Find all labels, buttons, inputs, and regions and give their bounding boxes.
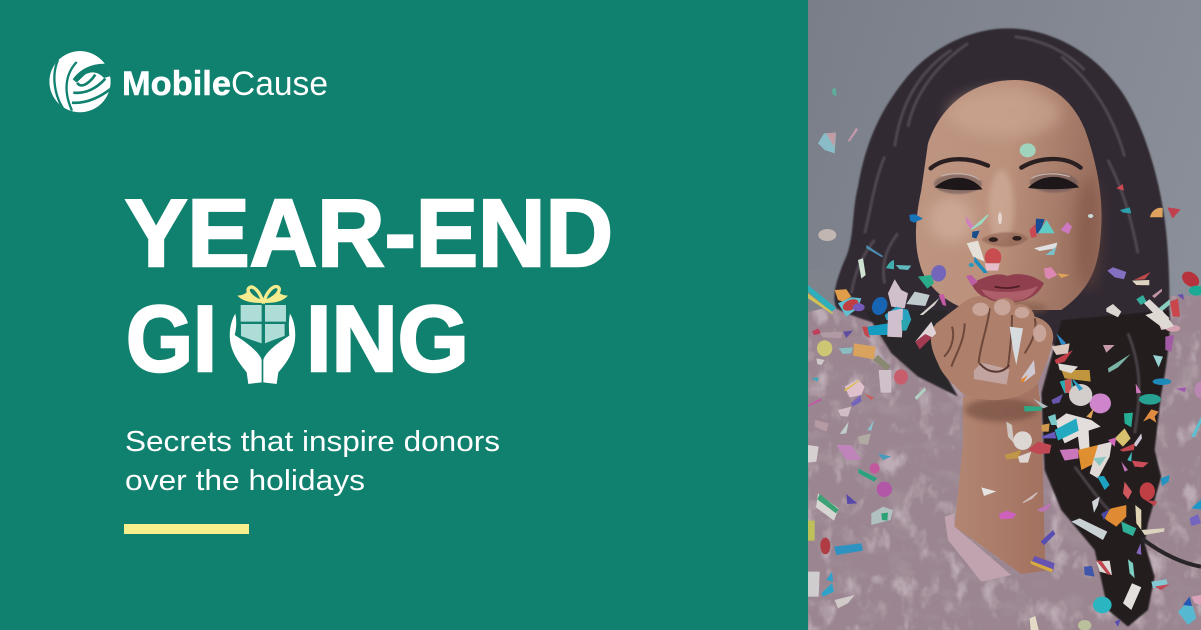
nose [981,212,1028,247]
logo: MobileCause [49,51,328,112]
hands [230,314,295,384]
hair back [834,28,1201,627]
ring [974,363,1009,385]
arm and collar [945,383,1045,582]
green background panel [0,0,808,630]
photo backdrop [808,0,1201,296]
photo: woman blowing confetti [808,0,1201,630]
yellow accent bar [124,524,249,534]
subtitle [125,426,500,497]
title: YEAR-END: YEAR-END [125,180,613,287]
face [916,80,1102,316]
gift box [241,305,286,343]
eyes [934,173,1079,194]
lips [971,274,1044,303]
hand [931,296,1053,400]
title: GIVING with gift icon: ING [306,286,469,391]
subtitle: over the holidays [125,465,365,497]
title: GIVING with gift icon: GI [126,286,217,391]
confetti lower [808,308,1201,630]
eyebrows [931,159,1081,168]
bow tails [237,290,288,303]
photo dim overlay [808,144,1201,630]
logo wordmark: Mobile [122,65,231,103]
icon: gift in hands [230,287,295,384]
confetti upper [808,87,1201,322]
title: GIVING with gift icon [126,286,469,391]
fur coat [808,270,1201,630]
logo wordmark: Cause [231,65,328,103]
logo wordmark [122,65,328,103]
ribbon bow [248,287,279,302]
icon: striped globe [49,51,113,112]
subtitle: Secrets that inspire donors [125,426,500,458]
